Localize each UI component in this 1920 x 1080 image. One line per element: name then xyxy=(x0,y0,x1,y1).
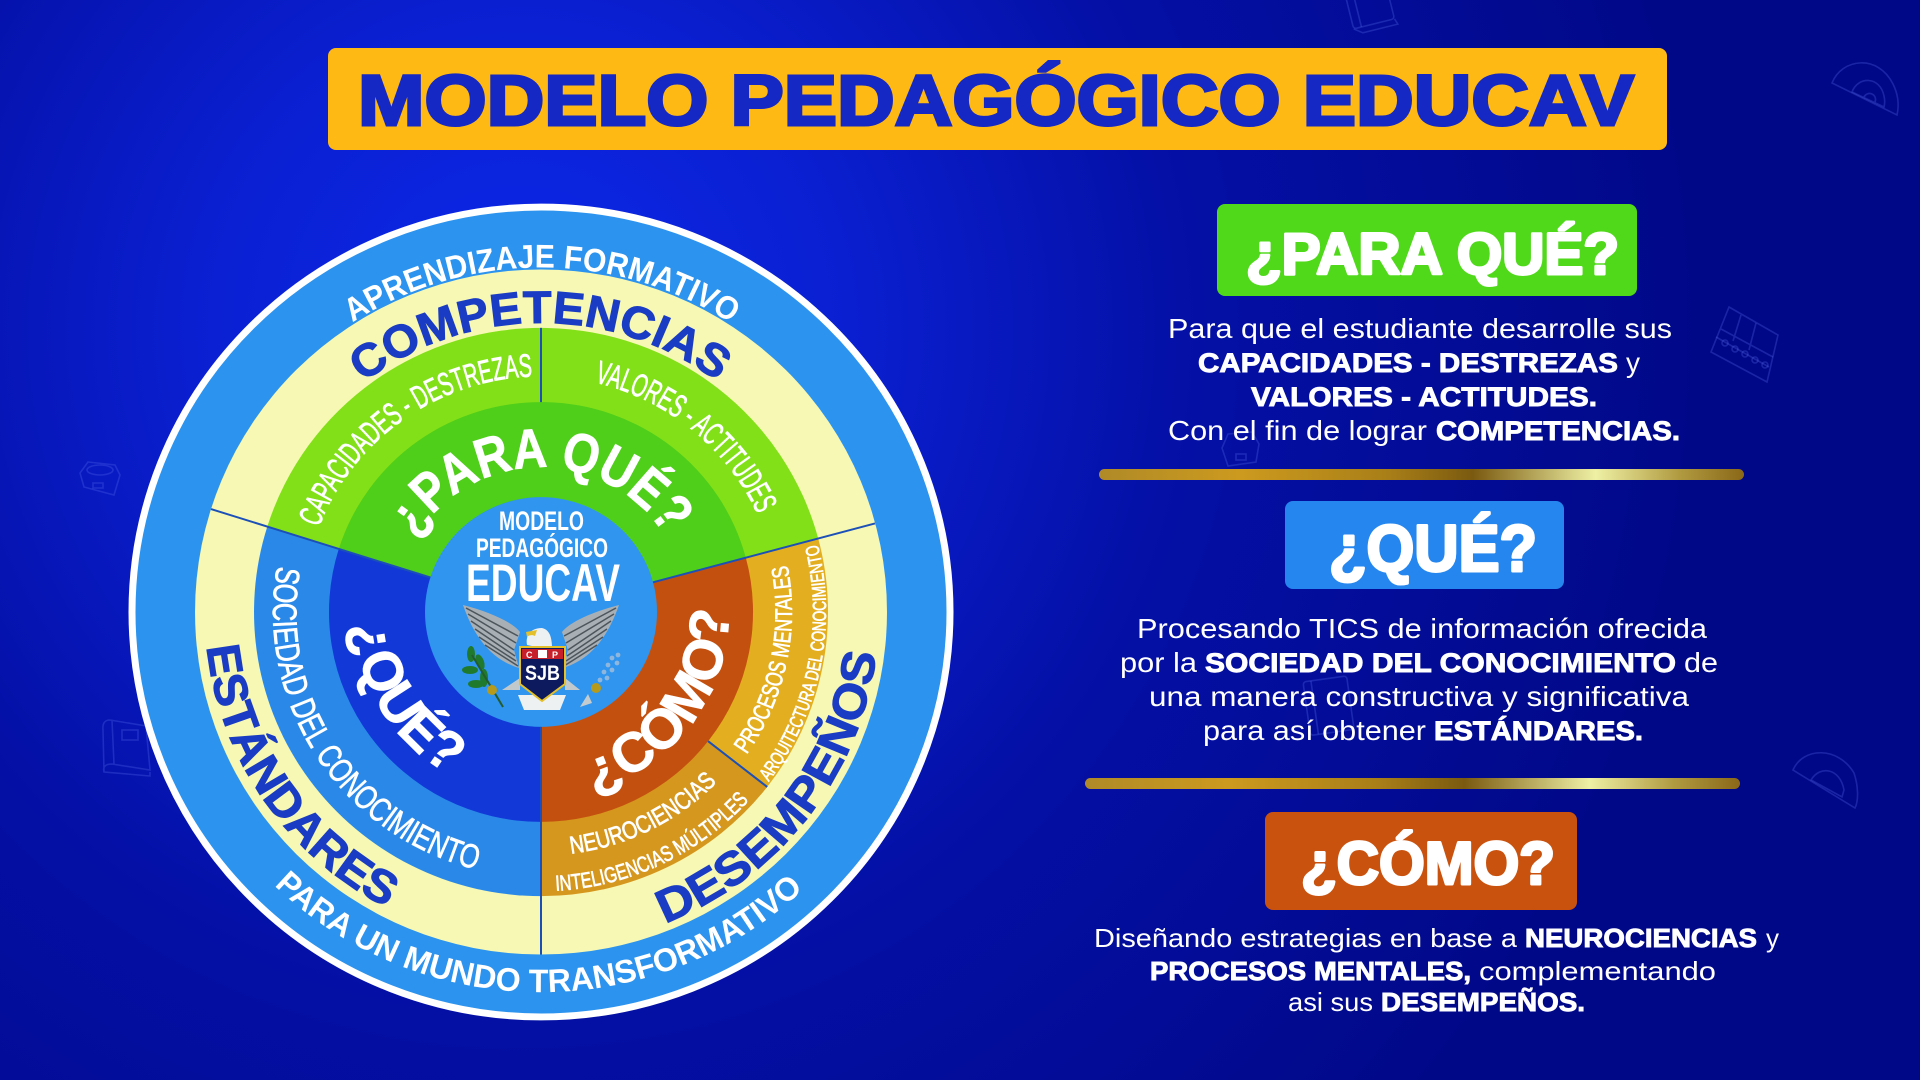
text block: como: Diseñando estrategias en base a xyxy=(1094,923,1518,953)
text block: como: asi sus xyxy=(1288,987,1373,1017)
label: valores actitudes: VALORES - ACTITUDES xyxy=(600,360,776,512)
label: como: ¿CÓMO? xyxy=(594,610,729,796)
sector: para que xyxy=(339,402,746,612)
label: inteligencias multiples: INTELIGENCIAS MÚLTIPLES xyxy=(556,792,748,891)
text block: que xyxy=(1120,613,1718,746)
icon: protractor top right xyxy=(1832,63,1898,115)
text block: para que: y xyxy=(1626,347,1640,378)
label: desempenos: DESEMPEÑOS xyxy=(654,652,876,924)
icon: cup left xyxy=(80,462,120,495)
badge: como: ¿CÓMO? xyxy=(1301,830,1555,897)
center title text: PEDAGÓGICO xyxy=(476,532,608,563)
text block: para que xyxy=(1168,313,1680,446)
badge: que xyxy=(1285,501,1564,589)
title: MODELO PEDAGÓGICO EDUCAV xyxy=(358,62,1634,141)
icon: cup behind text xyxy=(1222,432,1259,466)
outer ring xyxy=(132,207,950,1017)
text block: que: por la xyxy=(1120,647,1197,678)
wheel diagram xyxy=(128,204,954,1020)
text block: que: una manera constructiva y significativa xyxy=(1149,681,1689,712)
text block: para que: COMPETENCIAS. xyxy=(1436,416,1680,446)
icon: abacus xyxy=(1711,307,1778,382)
text block: para que: Para que el estudiante desarrolle sus xyxy=(1168,313,1672,344)
icon: eagle crest: C xyxy=(526,650,533,660)
inner ring sector: sociedad del conocimiento xyxy=(254,527,541,896)
text block: que: SOCIEDAD DEL CONOCIMIENTO xyxy=(1205,648,1676,678)
center title text: MODELO xyxy=(499,506,584,536)
label: sociedad del conocimiento: SOCIEDAD DEL CONOCIMIENTO xyxy=(272,568,480,868)
text block: que: ESTÁNDARES. xyxy=(1434,715,1643,746)
text block: como: PROCESOS MENTALES, xyxy=(1150,956,1471,986)
icon: protractor right xyxy=(1793,753,1858,808)
label: para que: ¿PARA QUÉ? xyxy=(397,429,692,538)
text block: como xyxy=(1094,923,1779,1017)
label: capacidades destrezas: CAPACIDADES - DESTREZAS xyxy=(300,354,532,524)
inner ring sector: procesos mentales xyxy=(541,538,828,787)
title banner xyxy=(328,48,1667,150)
icon: eagle crest: SJB xyxy=(525,662,560,685)
center title text xyxy=(466,506,620,613)
badge: como xyxy=(1265,812,1577,910)
sector: como xyxy=(541,558,753,822)
text block: como: NEUROCIENCIAS xyxy=(1525,923,1757,953)
label: arquitectura del conocimiento: ARQUITECTURA DEL CONOCIMIENTO xyxy=(760,546,827,782)
text block: que: para así obtener xyxy=(1203,715,1426,746)
panel: como xyxy=(1094,812,1779,1017)
icon: book behind text xyxy=(1303,676,1354,735)
panel: que xyxy=(1120,501,1718,746)
sector: que xyxy=(329,549,541,822)
label: aprendizaje formativo: APRENDIZAJE FORMATIVO xyxy=(348,244,738,322)
text block: que: Procesando TICS de información ofrecida xyxy=(1137,613,1707,644)
inner ring sector: capacidades valores xyxy=(267,328,818,612)
divider: gold bar 2 xyxy=(1085,778,1740,789)
center circle xyxy=(425,497,657,727)
cream ring xyxy=(195,269,887,955)
text block: para que: Con el fin de lograr xyxy=(1168,415,1427,446)
text block: que: de xyxy=(1684,647,1718,678)
badge: para que: ¿PARA QUÉ? xyxy=(1246,222,1619,287)
icon: book top xyxy=(1345,0,1398,35)
badge: para que xyxy=(1217,204,1637,296)
text block: para que: CAPACIDADES - DESTREZAS xyxy=(1198,348,1618,378)
text block: como: y xyxy=(1766,923,1779,953)
text block: como: DESEMPEÑOS. xyxy=(1381,987,1585,1017)
icon: eagle crest xyxy=(462,605,620,710)
label: procesos mentales: PROCESOS MENTALES xyxy=(733,566,792,754)
center title text: EDUCAV xyxy=(466,554,620,613)
text block: para que: VALORES - ACTITUDES. xyxy=(1251,382,1597,412)
label: neurociencias: NEUROCIENCIAS xyxy=(570,772,715,854)
label: que: ¿QUÉ? xyxy=(345,627,464,768)
label: para un mundo transformativo: PARA UN MUNDO TRANSFORMATIVO xyxy=(276,870,799,992)
panel: para que xyxy=(1168,204,1680,446)
text block: como: complementando xyxy=(1479,956,1716,986)
icon: book left xyxy=(103,720,150,776)
inner ring sector: neurociencias xyxy=(541,612,767,896)
label: competencias: COMPETENCIAS xyxy=(352,291,730,377)
icon: eagle crest: P xyxy=(552,650,558,660)
divider: gold bar 1 xyxy=(1099,469,1744,480)
label: estandares: ESTÁNDARES xyxy=(206,644,398,904)
badge: que: ¿QUÉ? xyxy=(1329,511,1537,585)
